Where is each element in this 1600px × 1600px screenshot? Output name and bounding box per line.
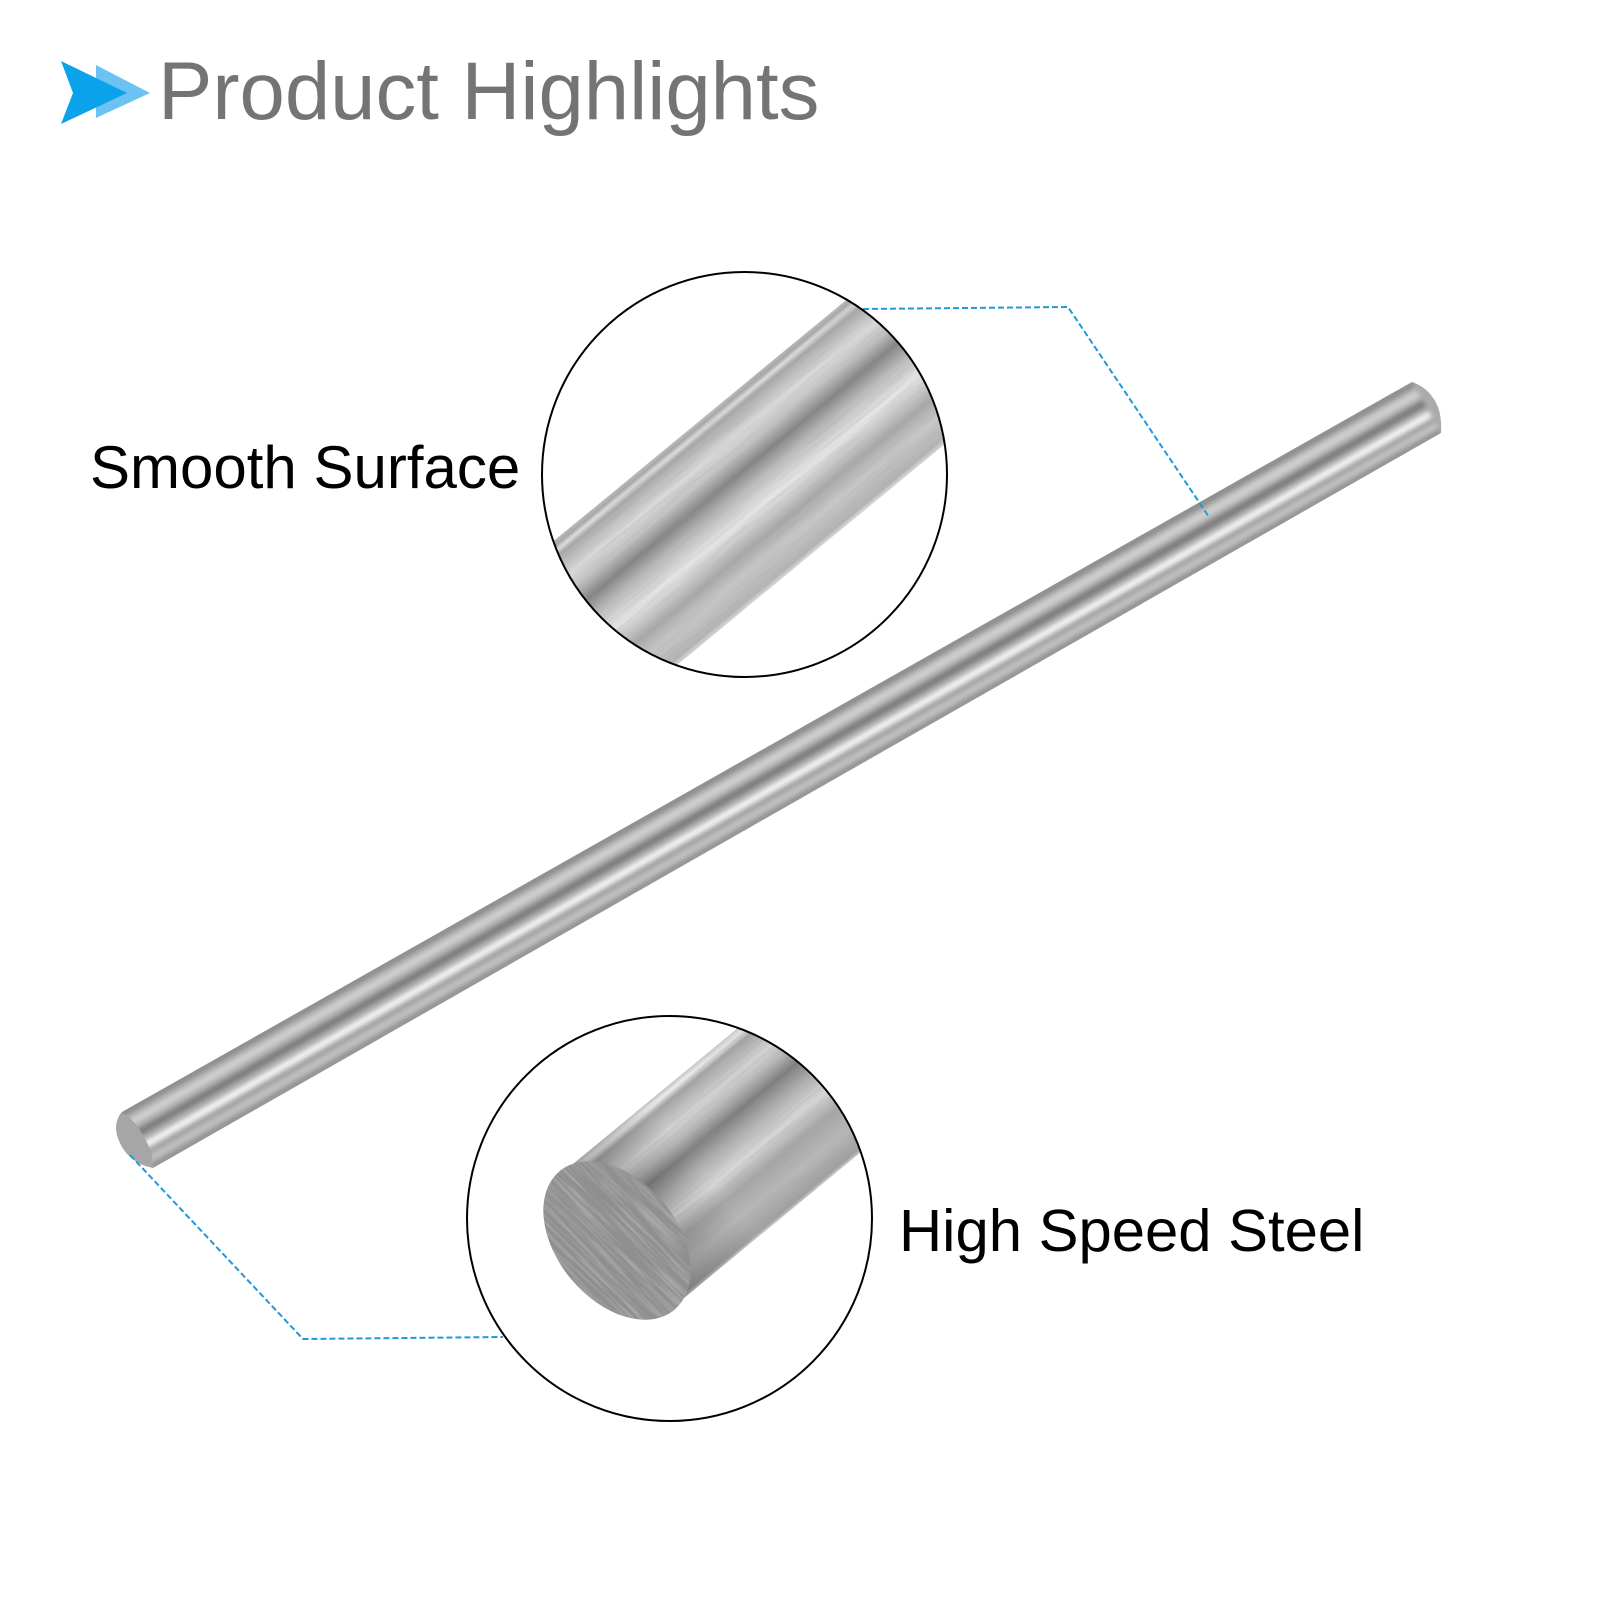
label: smooth surface: Smooth Surface (90, 434, 520, 501)
rod end face (116, 1113, 152, 1165)
callout connector: smooth surface (863, 307, 1209, 517)
label: high speed steel: High Speed Steel (899, 1197, 1364, 1264)
magnifier: high speed steel (466, 1015, 873, 1422)
main steel rod (100, 370, 1460, 1180)
callout connector: high speed steel (130, 1155, 503, 1339)
title: Product Highlights (158, 46, 819, 137)
icon: double arrow (61, 61, 150, 124)
magnifier: smooth surface (541, 271, 948, 678)
